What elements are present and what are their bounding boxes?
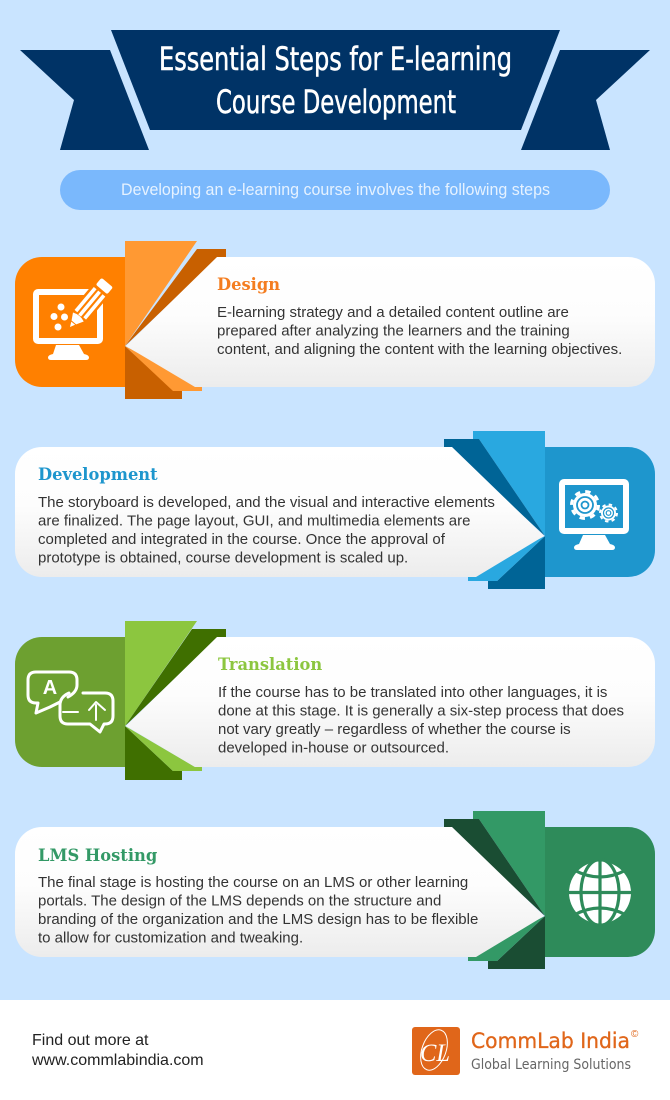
text: development: prototype is obtained, course development is scaled up. <box>38 550 408 566</box>
heading: design: Design <box>217 275 280 294</box>
folded corners: design <box>125 241 226 399</box>
card: lms hosting <box>15 827 544 957</box>
folded corners: translation <box>125 621 226 780</box>
logo: CL <box>420 1040 450 1067</box>
icon: translation speech bubbles: A <box>43 677 57 699</box>
folded corners: lms hosting <box>444 811 545 969</box>
heading: development: Development <box>38 465 158 484</box>
text: design <box>217 304 622 358</box>
logo: CommLab India <box>471 1029 630 1053</box>
banner ribbon <box>20 30 650 150</box>
card: development <box>15 447 544 577</box>
title <box>159 40 512 121</box>
icon: translation speech bubbles <box>28 672 113 732</box>
footer text <box>31 1032 204 1069</box>
logo: © <box>631 1029 639 1040</box>
text: lms hosting: branding of the organization and the LMS design has to be flexible <box>38 911 478 928</box>
text: design: prepared after analyzing the learners and the training <box>217 322 570 340</box>
text: development: are finalized. The page layout, GUI, and multimedia elements are <box>38 512 470 530</box>
text: translation <box>218 684 624 756</box>
text: translation: developed in-house or outsourced. <box>218 740 449 756</box>
text: development <box>38 494 495 566</box>
subtitle pill: Developing an e-learning course involves the following steps <box>121 180 550 199</box>
text: development: The storyboard is developed, and the visual and interactive elements <box>38 494 495 511</box>
card: design <box>126 257 655 387</box>
card: translation <box>126 637 655 767</box>
text: design: content, and aligning the content with the learning objectives. <box>217 341 622 358</box>
text: lms hosting: to allow for customization and tweaking. <box>38 930 303 946</box>
icon: globe <box>568 859 632 926</box>
logo: Global Learning Solutions <box>471 1057 631 1073</box>
text: lms hosting <box>38 874 478 946</box>
text: lms hosting: The final stage is hosting the course on an LMS or other learning <box>38 874 468 891</box>
text: lms hosting: portals. The design of the LMS depends on the structure and <box>38 892 441 910</box>
panel: translation <box>15 621 655 780</box>
text: translation: not vary greatly – regardless of whether the course is <box>218 721 571 738</box>
folded corners: development <box>444 431 545 589</box>
text: development: completed and integrated in the course. Once the approval of <box>38 531 446 548</box>
panel: development <box>15 431 655 589</box>
text: translation: done at this stage. It is generally a six-step process that does <box>218 702 624 720</box>
text: translation: If the course has to be translated into other languages, it is <box>218 684 607 701</box>
icon: monitor with pencil <box>36 276 115 360</box>
icon: monitor with gears <box>562 482 626 550</box>
title: Essential Steps for E-learning <box>159 40 512 78</box>
footer band <box>0 1000 670 1100</box>
panel: lms hosting <box>15 811 655 969</box>
heading: lms hosting: LMS Hosting <box>38 846 157 865</box>
panel: design <box>15 241 655 399</box>
logo <box>412 1026 639 1075</box>
footer text: Find out more at <box>32 1032 149 1049</box>
footer text: www.commlabindia.com <box>31 1052 204 1069</box>
text: design: E-learning strategy and a detailed content outline are <box>217 304 569 321</box>
icon box: design <box>15 257 125 387</box>
icon box: lms hosting <box>545 827 655 957</box>
icon box: development <box>545 447 655 577</box>
icon box: translation <box>15 637 125 767</box>
heading: translation: Translation <box>218 655 322 674</box>
title: Course Development <box>216 83 456 121</box>
subtitle pill <box>60 170 610 210</box>
